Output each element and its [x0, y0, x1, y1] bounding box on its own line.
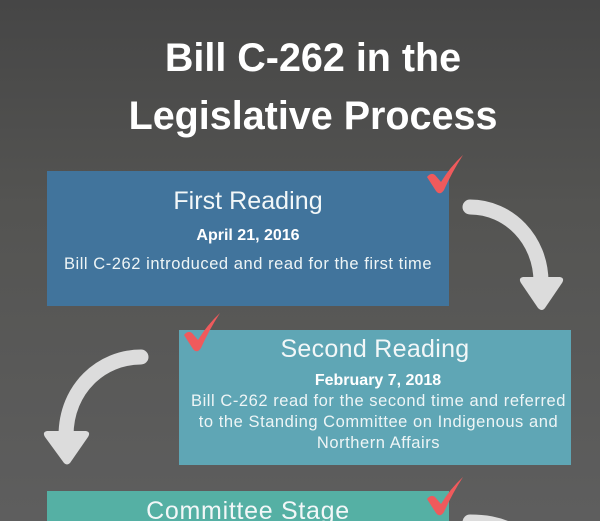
heading: first reading: First Reading	[173, 187, 323, 215]
text: second reading	[191, 392, 566, 452]
title	[129, 36, 497, 138]
title: Legislative Process	[129, 94, 497, 138]
text: second reading: Northern Affairs	[317, 434, 440, 452]
date: second reading: February 7, 2018	[315, 372, 441, 389]
text: first reading: Bill C-262 introduced and read for the first time	[64, 255, 432, 273]
panel: committee stage	[47, 491, 449, 521]
heading: second reading: Second Reading	[280, 335, 470, 363]
text: second reading: to the Standing Committee on Indigenous and	[199, 413, 558, 431]
panel: second reading	[179, 330, 571, 465]
panel: first reading	[47, 171, 449, 306]
date: first reading: April 21, 2016	[196, 227, 300, 244]
title: Bill C-262 in the	[165, 36, 461, 80]
text: second reading: Bill C-262 read for the second time and referred	[191, 392, 566, 410]
